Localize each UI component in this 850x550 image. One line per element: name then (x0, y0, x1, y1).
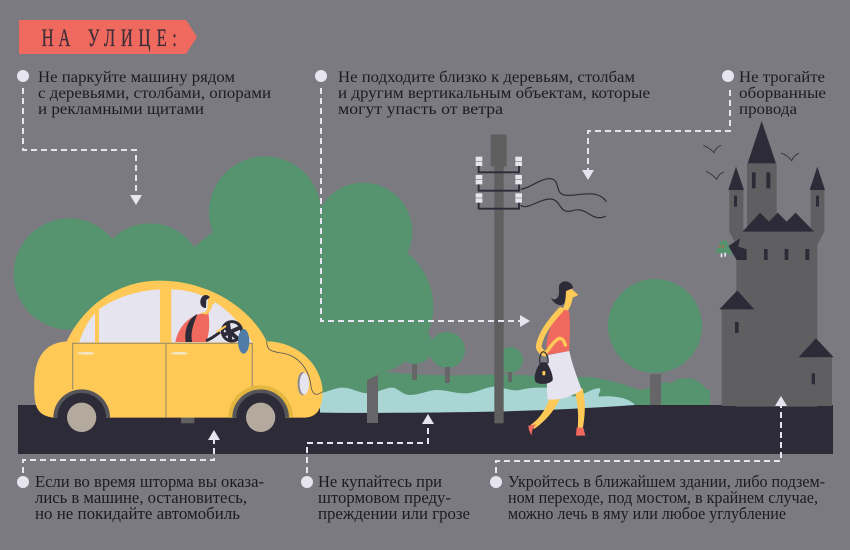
water puddle (320, 387, 635, 413)
title banner (19, 20, 197, 54)
callout: stay in the car: лись в машине, остановитесь, (35, 488, 247, 507)
utility pole with wires (476, 134, 607, 423)
headlight and hood line (267, 341, 323, 395)
callout: parking: Не паркуйте машину рядом (38, 69, 235, 86)
callout: no swimming: штормовом преду- (318, 488, 451, 507)
car (34, 281, 323, 442)
callout: parking: с деревьями, столбами, опорами (38, 85, 271, 102)
road (18, 405, 833, 454)
callout: trees and poles (315, 69, 650, 327)
callout: wires: Не трогайте (739, 69, 825, 86)
trees background (14, 156, 710, 426)
callout: shelter: можно лечь в яму или любое углубление (508, 504, 786, 523)
title banner: НАУЛИЦЕ: (42, 23, 177, 52)
wheels (53, 385, 293, 442)
callout: parking (17, 69, 271, 205)
callout: trees and poles: Не подходите близко к деревьям, столбам (338, 69, 635, 86)
callout: wires: провода (739, 101, 797, 118)
callout: shelter: ном переходе, под мостом, в крайнем случае, (508, 488, 818, 507)
callout: stay in the car (17, 430, 264, 523)
callout: wires: оборванные (739, 85, 826, 102)
callout: no swimming: преждении или грозе (318, 504, 470, 523)
callout: stay in the car: Если во время шторма вы оказа- (35, 472, 264, 491)
callout: no swimming (301, 414, 470, 523)
callout: no swimming: Не купайтесь при (318, 472, 442, 491)
callout: stay in the car: но не покидайте автомобиль (35, 504, 240, 523)
castle (703, 121, 834, 407)
callout: shelter: Укройтесь в ближайшем здании, либо подзем- (508, 472, 825, 491)
car windows (79, 289, 252, 342)
driver (175, 295, 242, 342)
callout: parking: и рекламными щитами (38, 101, 204, 118)
callout: trees and poles: могут упасть от ветра (338, 101, 503, 118)
door outlines (73, 343, 252, 418)
callout: trees and poles: и другим вертикальным объектам, которые (338, 85, 650, 102)
tree trunk near water (367, 375, 378, 423)
woman with bag (528, 281, 585, 436)
callout: wires (582, 69, 826, 180)
callout: shelter (490, 396, 825, 523)
tree trunks (412, 364, 661, 412)
